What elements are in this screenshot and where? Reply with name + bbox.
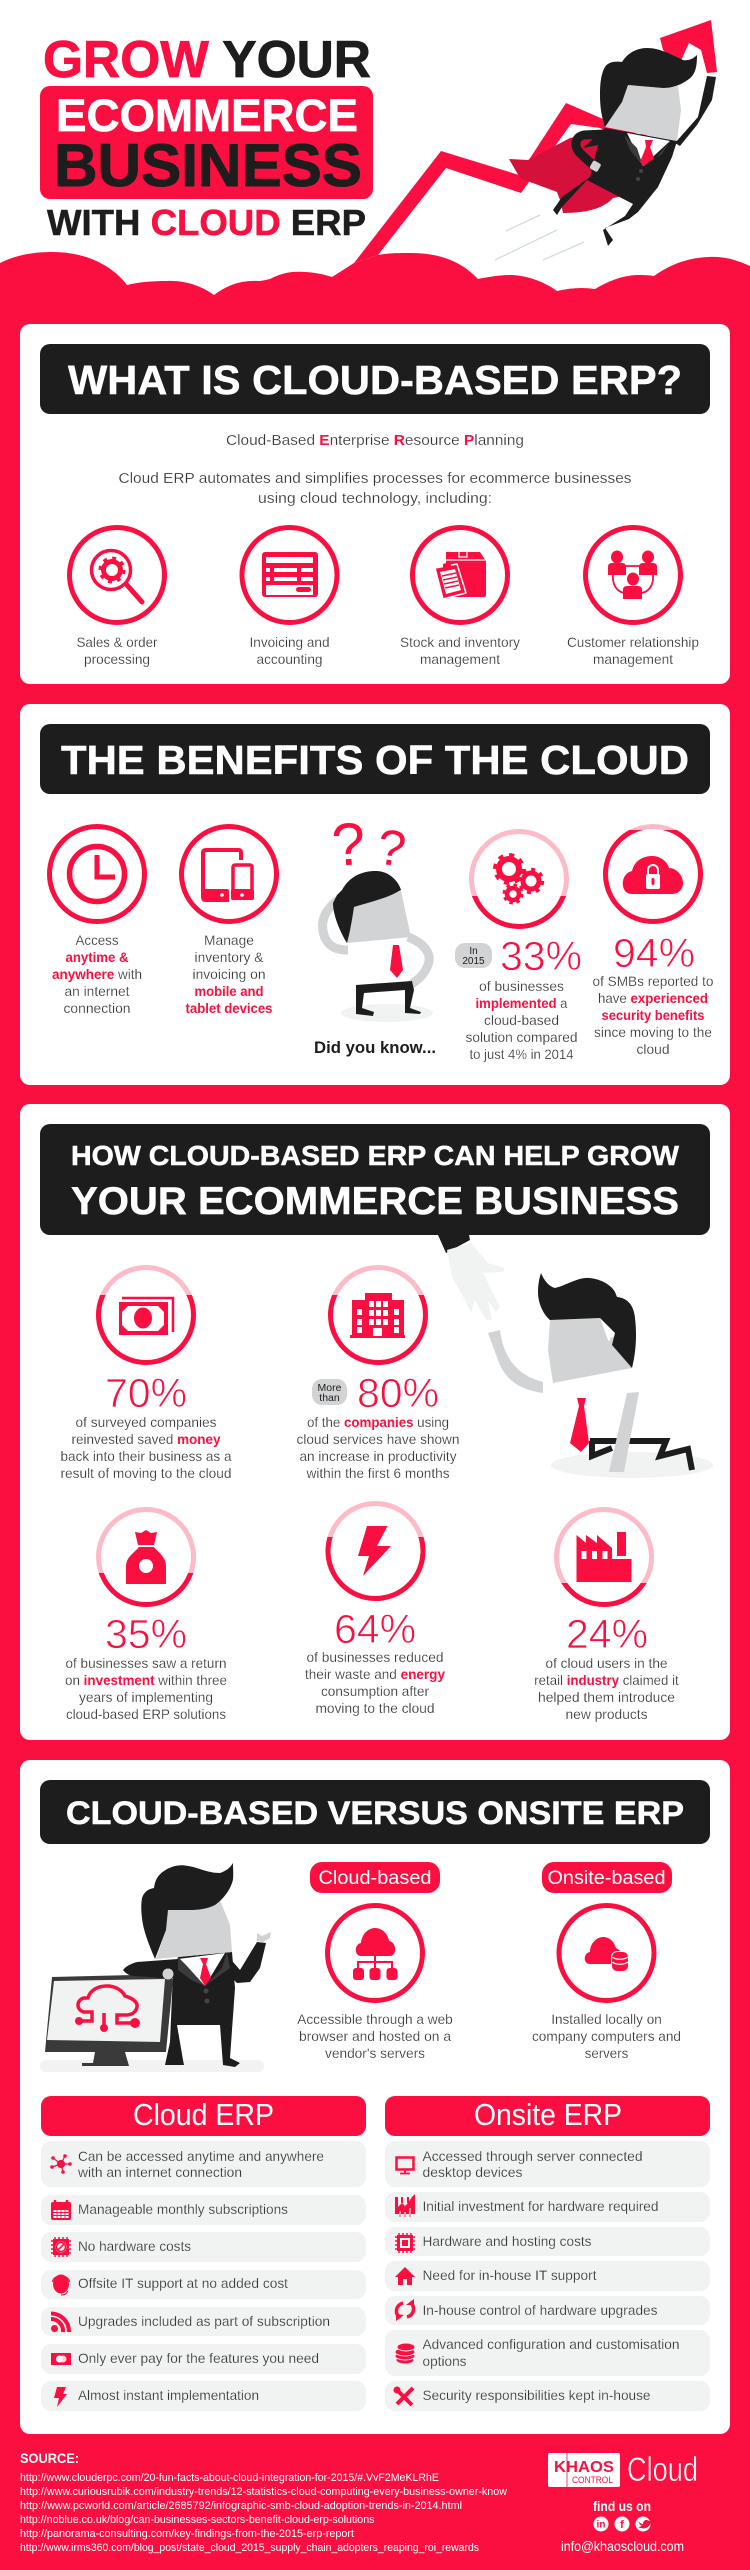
bent arm <box>576 134 605 167</box>
social icons: in <box>597 2520 605 2530</box>
callout: more than: More <box>318 1382 342 1394</box>
face <box>605 85 681 141</box>
heading bar <box>40 1124 710 1235</box>
icon: office building, 80% ring <box>330 1268 426 1362</box>
panel: how cloud-based ERP can help <box>20 1104 730 1740</box>
icon: customer relationship <box>586 528 680 622</box>
arms <box>323 900 429 985</box>
footer: sources <box>20 2450 507 2554</box>
cuff <box>438 1235 470 1253</box>
row: desktop devices: Accessed through server connected <box>422 2148 642 2164</box>
icon: money bag, 35% ring <box>98 1510 194 1604</box>
text: cloud-based description: browser and hosted on a <box>299 2028 451 2044</box>
text: 80% caption: an increase in productivity <box>300 1448 456 1464</box>
title line: with cloud erp: WITH CLOUD ERP <box>47 202 366 243</box>
icon: clock <box>50 826 144 922</box>
row: initial investment <box>385 2192 710 2222</box>
row: advanced configuration: Advanced configuration and customisation <box>422 2336 680 2352</box>
text: 80% caption: within the first 6 months <box>306 1465 450 1481</box>
cape <box>509 132 628 213</box>
text: 70% caption: result of moving to the cloud <box>60 1465 232 1481</box>
heading bar <box>40 724 710 794</box>
hair <box>141 1863 233 1959</box>
callout: in 2015: In <box>469 946 478 957</box>
text: anytime and anywhere: connection <box>64 1000 130 1016</box>
label: customer relationship: management <box>593 651 673 667</box>
icon: cloud hierarchy <box>328 1906 422 2000</box>
row: accessed anytime: with an internet connection <box>77 2164 242 2180</box>
row: accessed anytime: Can be accessed anytime and anywhere <box>78 2148 324 2164</box>
lapels <box>624 135 670 166</box>
column: onsite ERP <box>385 2096 710 2411</box>
question marks: ? <box>330 810 368 879</box>
label: sales and order <box>76 634 158 667</box>
question marks: ? <box>374 818 409 878</box>
row: hardware upgrades <box>385 2296 710 2325</box>
source link 1: http://www.clouderpc.com/20-fun-facts-about-cloud-integration-for-2015/#.VvF2MeKLRhE <box>20 2472 439 2484</box>
legs <box>356 981 421 1016</box>
text: mobile and tablet: inventory & <box>194 949 264 965</box>
callout: more than: than <box>319 1392 340 1404</box>
label: customer relationship <box>567 634 699 667</box>
text: 24% caption <box>534 1655 679 1722</box>
stat: 80%: 80% <box>357 1370 439 1416</box>
row: no hardware costs <box>41 2232 366 2262</box>
source link 4: http://noblue.co.uk/blog/can-businesses-sectors-benefit-cloud-erp-solutions <box>20 2514 375 2526</box>
text: 33% caption: cloud-based <box>484 1012 559 1028</box>
text: 80% caption <box>296 1414 460 1481</box>
text: 64% caption: consumption after <box>321 1683 429 1699</box>
callout: in 2015 <box>455 943 492 968</box>
shadow <box>551 1452 713 1478</box>
ear <box>159 1922 167 1930</box>
icon: cloud lock, 94% ring <box>606 826 700 922</box>
row: instant implementation: Almost instant implementation <box>78 2387 259 2403</box>
label: stock and inventory: Stock and inventory <box>400 634 520 650</box>
heading bar <box>40 344 710 414</box>
text: 70% caption: of surveyed companies <box>76 1414 216 1430</box>
icon: factory, 24% ring <box>556 1510 652 1604</box>
text: onsite-based description: company computers and <box>532 2028 681 2044</box>
callout: more than <box>312 1379 347 1405</box>
lapels <box>178 1952 230 1986</box>
panel background <box>20 1760 730 2434</box>
panel background <box>20 1104 730 1740</box>
text: 64% caption: moving to the cloud <box>316 1700 434 1716</box>
source link 5: http://panorama-consulting.com/key-findings-from-the-2015-erp-report <box>20 2528 354 2540</box>
legs <box>590 1441 692 1470</box>
shirt <box>627 133 670 166</box>
row: advanced configuration <box>385 2330 710 2376</box>
text: cloud-based description: vendor's servers <box>325 2045 425 2061</box>
label: sales and order: processing <box>84 651 150 667</box>
row: pay for features <box>41 2344 366 2374</box>
panel background <box>20 324 730 684</box>
logo <box>548 2451 698 2489</box>
label: invoicing: Invoicing and <box>250 634 330 650</box>
heading bar <box>40 1780 710 1844</box>
text: 35% caption: on investment within three <box>65 1672 227 1688</box>
row: security responsibilities <box>385 2381 710 2411</box>
stat: 94%: 94% <box>613 930 695 976</box>
text: 94% caption: of SMBs reported to <box>592 973 714 989</box>
stand <box>82 2052 129 2066</box>
text: 35% caption <box>65 1655 227 1722</box>
find us on: find us on <box>593 2498 651 2514</box>
monitor frame <box>45 1974 173 2052</box>
source link 6: http://www.irms360.com/blog_post/state_cloud_2015_supply_chain_adopters_reaping_roi_rewards <box>20 2542 479 2554</box>
text: 24% caption: retail industry claimed it <box>534 1672 679 1688</box>
tag: onsite-based: Onsite-based <box>548 1868 666 1889</box>
text: 33% caption: to just 4% in 2014 <box>470 1046 574 1062</box>
text: 64% caption: their waste and energy <box>305 1666 445 1682</box>
tag: onsite-based <box>542 1862 672 1893</box>
text: 64% caption: of businesses reduced <box>306 1649 444 1665</box>
flying businessman <box>509 48 716 246</box>
intro line 1: Cloud ERP automates and simplifies processes for ecommerce businesses <box>118 470 632 487</box>
text: 94% caption: since moving to the <box>594 1024 712 1040</box>
shadow <box>341 1004 433 1022</box>
motion lines <box>495 215 584 260</box>
label: invoicing: accounting <box>256 651 322 667</box>
label: stock and inventory: management <box>420 651 500 667</box>
title <box>40 31 373 243</box>
face <box>548 1318 632 1383</box>
source link 2: http://www.curiousrubik.com/industry-trends/12-statistics-cloud-computing-every-business-owner-know <box>20 2486 507 2498</box>
hand <box>257 1932 271 1942</box>
row: monthly subscriptions <box>41 2195 366 2225</box>
row: in-house support <box>385 2261 710 2291</box>
kneeling businessman <box>438 1235 713 1478</box>
text: 24% caption: of cloud users in the <box>546 1655 668 1671</box>
buttons <box>636 169 643 181</box>
near arm <box>609 1392 639 1472</box>
email: info@khaoscloud.com <box>561 2538 684 2554</box>
tag: cloud-based: Cloud-based <box>318 1868 432 1889</box>
row: no hardware costs: No hardware costs <box>78 2238 191 2254</box>
ear <box>616 98 624 106</box>
row: upgrades included <box>41 2307 366 2336</box>
row: accessed anytime <box>41 2141 366 2187</box>
row: instant implementation <box>41 2381 366 2411</box>
text: 94% caption: cloud <box>636 1041 670 1057</box>
row: hardware and hosting <box>385 2227 710 2256</box>
text: 35% caption: cloud-based ERP solutions <box>66 1706 226 1722</box>
logo: CONTROL <box>572 2475 613 2485</box>
title line: grow your: GROW YOUR <box>43 31 371 89</box>
column heading <box>41 2096 366 2136</box>
stat: 64%: 64% <box>334 1606 416 1652</box>
icon: stock and inventory <box>412 528 508 622</box>
monitor screen <box>47 1979 165 2042</box>
social icons <box>594 2516 651 2532</box>
stat: 24%: 24% <box>566 1611 648 1657</box>
text: onsite-based description: servers <box>585 2045 628 2061</box>
hand <box>447 1243 505 1320</box>
heading: CLOUD-BASED VERSUS ONSITE ERP <box>66 1795 684 1831</box>
row: initial investment: Initial investment for hardware required <box>422 2198 658 2214</box>
footer: logo and contact <box>548 2451 698 2554</box>
text: mobile and tablet: mobile and <box>194 983 264 999</box>
tie <box>200 1958 211 1986</box>
panel: benefits of the cloud <box>20 704 730 1085</box>
heading line 2: YOUR ECOMMERCE BUSINESS <box>71 1180 679 1223</box>
shirt <box>178 1953 225 1986</box>
text: cloud-based description <box>297 2011 453 2061</box>
label: customer relationship: Customer relationship <box>567 634 699 650</box>
text: mobile and tablet: invoicing on <box>192 966 266 982</box>
tie <box>570 1398 589 1452</box>
heading line 1: HOW CLOUD-BASED ERP CAN HELP GROW <box>71 1140 680 1171</box>
question marks <box>330 810 409 879</box>
label: stock and inventory <box>400 634 520 667</box>
stat: 70%: 70% <box>105 1370 187 1416</box>
text: 70% caption: reinvested saved money <box>72 1431 221 1447</box>
text: anytime and anywhere: an internet <box>64 983 130 999</box>
face <box>347 891 411 943</box>
businessman with monitor <box>40 1863 271 2072</box>
text: 80% caption: of the companies using <box>307 1414 449 1430</box>
icon: cloud and server <box>559 1906 654 2000</box>
text: mobile and tablet: tablet devices <box>186 1000 273 1016</box>
icon: money, 70% ring <box>98 1268 194 1362</box>
text: anytime and anywhere: anytime & <box>66 949 128 965</box>
tag: cloud-based <box>310 1862 440 1893</box>
icon: sales and order <box>70 528 164 622</box>
jacket <box>553 128 677 246</box>
shadow <box>40 2060 264 2072</box>
title line: ecommerce: ECOMMERCE <box>56 90 358 141</box>
title line: business: BUSINESS <box>54 132 362 199</box>
text: 33% caption <box>466 978 578 1062</box>
text: onsite-based description <box>532 2011 681 2061</box>
arm on monitor <box>123 1959 178 1978</box>
did you know: Did you know... <box>314 1038 436 1057</box>
text: 24% caption: new products <box>566 1706 648 1722</box>
tie <box>390 945 403 978</box>
text: 33% caption: solution compared <box>466 1029 578 1045</box>
logo: KHAOS <box>554 2459 614 2476</box>
header clouds <box>0 0 750 295</box>
intro line 2: using cloud technology, including: <box>258 490 492 507</box>
tie <box>640 140 654 166</box>
stat: 33%: 33% <box>500 933 582 979</box>
heading: WHAT IS CLOUD-BASED ERP? <box>68 357 682 403</box>
column heading <box>385 2096 710 2136</box>
icon: gears, 33% ring <box>472 832 566 926</box>
row: in-house support: Need for in-house IT support <box>422 2267 597 2283</box>
column heading: Onsite ERP <box>474 2097 622 2132</box>
text: 33% caption: implemented a <box>476 995 568 1011</box>
text: 70% caption <box>60 1414 232 1481</box>
text: mobile and tablet <box>186 932 273 1016</box>
jacket and legs <box>165 1952 240 2067</box>
right arm <box>227 1942 266 1983</box>
hair <box>333 871 401 943</box>
source link 3: http://www.pcworld.com/article/2685792/infographic-smb-cloud-adoption-trends-in-2014.html <box>20 2500 462 2512</box>
text: anytime and anywhere: anywhere with <box>52 966 142 982</box>
hair <box>600 48 697 127</box>
logo: Cloud <box>627 2451 698 2489</box>
text: 94% caption: security benefits <box>602 1007 705 1023</box>
text: onsite-based description: Installed locally on <box>551 2011 662 2027</box>
title red box <box>40 86 373 199</box>
raised arm <box>675 76 716 146</box>
row: offsite IT support <box>41 2270 366 2299</box>
row: hardware and hosting: Hardware and hosting costs <box>422 2233 592 2249</box>
text: 94% caption <box>592 973 714 1057</box>
label: invoicing <box>250 634 330 667</box>
row: offsite IT support: Offsite IT support at no added cost <box>78 2275 288 2291</box>
callout: in 2015: 2015 <box>462 956 485 967</box>
stat: 35%: 35% <box>105 1611 187 1657</box>
icon: invoicing <box>242 528 337 622</box>
column heading: Cloud ERP <box>133 2097 274 2132</box>
puzzled businessman <box>323 871 433 1022</box>
text: 35% caption: years of implementing <box>79 1689 213 1705</box>
icon: lightning, 64% ring <box>328 1504 423 1598</box>
row: security responsibilities: Security responsibilities kept in-house <box>422 2387 651 2403</box>
acronym line: Cloud-Based Enterprise Resource Planning <box>226 432 524 449</box>
hair <box>538 1273 636 1368</box>
ear <box>350 919 356 925</box>
glove <box>589 160 601 172</box>
row: desktop devices: desktop devices <box>422 2164 522 2180</box>
growth arrow <box>354 20 717 263</box>
row: pay for features: Only ever pay for the features you need <box>78 2350 319 2366</box>
text: mobile and tablet: Manage <box>204 932 254 948</box>
column: cloud ERP <box>41 2096 366 2411</box>
text: 24% caption: helped them introduce <box>538 1689 675 1705</box>
panel: what is cloud-based ERP <box>20 324 730 684</box>
row: advanced configuration: options <box>422 2353 466 2369</box>
social icons: f <box>620 2519 624 2531</box>
row: desktop devices <box>385 2141 710 2187</box>
row: monthly subscriptions: Manageable monthly subscriptions <box>78 2201 288 2217</box>
row: hardware upgrades: In-house control of hardware upgrades <box>422 2302 658 2318</box>
panel: cloud-based versus onsite ERP <box>20 1760 730 2434</box>
text: anytime and anywhere: Access <box>76 932 118 948</box>
text: 70% caption: back into their business as a <box>60 1448 232 1464</box>
raised arm <box>488 1330 543 1393</box>
text: anytime and anywhere <box>52 932 142 1016</box>
ear <box>610 1336 618 1346</box>
face <box>156 1900 232 1959</box>
label: sales and order: Sales & order <box>76 634 158 650</box>
glove <box>162 1968 174 1980</box>
panel background <box>20 704 730 1085</box>
heading: THE BENEFITS OF THE CLOUD <box>61 737 689 783</box>
buttons <box>204 1988 210 2004</box>
text: 64% caption <box>305 1649 445 1716</box>
icon: tablet and phone <box>182 826 276 922</box>
text: cloud-based description: Accessible through a web <box>297 2011 453 2027</box>
text: 94% caption: have experienced <box>598 990 708 1006</box>
cloud circuit icon <box>78 1986 137 2028</box>
text: 33% caption: of businesses <box>479 978 564 994</box>
text: 35% caption: of businesses saw a return <box>66 1655 226 1671</box>
row: upgrades included: Upgrades included as part of subscription <box>78 2313 330 2329</box>
text: 80% caption: cloud services have shown <box>296 1431 460 1447</box>
source heading: SOURCE: <box>20 2450 79 2466</box>
